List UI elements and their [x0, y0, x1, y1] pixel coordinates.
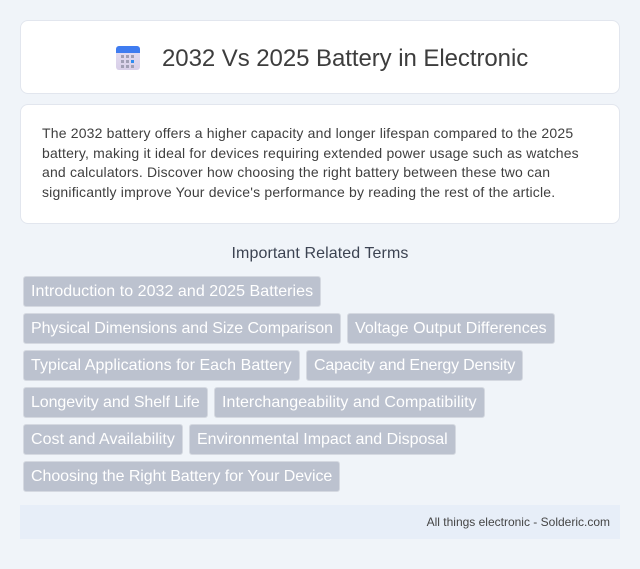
- tag: [347, 313, 555, 344]
- tag: [23, 276, 321, 307]
- tag: [306, 350, 523, 381]
- tag: Cost and Availability: [31, 431, 175, 448]
- tag: [23, 461, 340, 492]
- intro text panel: The 2032 battery offers a higher capacity and longer lifespan compared to the 2025: [42, 125, 573, 141]
- icon: calendar: [116, 46, 140, 70]
- tag: [214, 387, 485, 418]
- footer bar: All things electronic - Solderic.com: [427, 515, 610, 529]
- tag: Typical Applications for Each Battery: [31, 357, 292, 374]
- header panel: [20, 20, 620, 94]
- tag list: [23, 276, 555, 492]
- tag: Voltage Output Differences: [355, 320, 547, 337]
- tag: [23, 424, 183, 455]
- tag: [23, 313, 341, 344]
- intro text panel: significantly improve Your device's performance by reading the rest of the article.: [42, 184, 555, 200]
- title: 2032 Vs 2025 Battery in Electronic: [162, 45, 528, 72]
- tag: Introduction to 2032 and 2025 Batteries: [31, 283, 313, 300]
- tag: [23, 387, 208, 418]
- intro text panel: battery, making it ideal for devices requiring extended power usage such as watches: [42, 145, 579, 161]
- tag: Physical Dimensions and Size Comparison: [31, 320, 333, 337]
- tag: [189, 424, 456, 455]
- tag: Interchangeability and Compatibility: [222, 394, 477, 411]
- tag: Choosing the Right Battery for Your Device: [31, 468, 332, 485]
- section heading: Important Related Terms: [232, 245, 408, 262]
- tag: Longevity and Shelf Life: [31, 394, 200, 411]
- intro text panel: [20, 104, 620, 224]
- tag: Environmental Impact and Disposal: [197, 431, 448, 448]
- intro text panel: and calculators. Discover how choosing the right battery between these two can: [42, 164, 550, 180]
- footer bar: [20, 505, 620, 539]
- tag: [23, 350, 300, 381]
- tag: Capacity and Energy Density: [314, 357, 515, 374]
